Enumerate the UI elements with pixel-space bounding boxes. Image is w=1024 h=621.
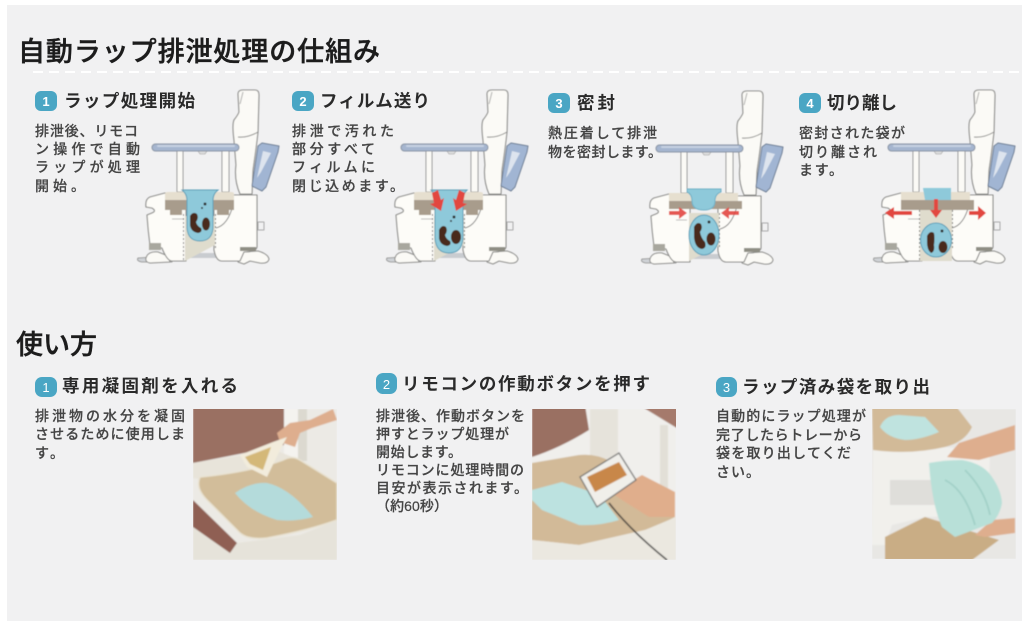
text: step 2: 閉じ込めます。 — [292, 178, 404, 194]
text: usage 1: させるために使用しま — [35, 426, 185, 442]
text: step 2: 排泄で汚れた — [292, 123, 394, 139]
illustration: chair step 3 — [642, 91, 783, 265]
photo: bag removal — [872, 405, 1016, 560]
step 4: cut off — [799, 90, 1015, 264]
text: usage 2: （約60秒） — [376, 498, 448, 514]
badge 2: 2 — [383, 377, 390, 392]
text: usage 1: す。 — [35, 445, 64, 461]
heading: step 1: ラップ処理開始 — [64, 91, 196, 111]
photo: pouring coagulant — [193, 405, 337, 560]
text: step 1: 開始。 — [35, 178, 85, 194]
badge 3: 3 — [555, 96, 563, 111]
text: usage 3: 袋を取り出してくだ — [716, 445, 851, 461]
usage 3: remove wrapped bag — [716, 377, 1016, 560]
title: how to use: 使い方 — [16, 330, 97, 360]
heading: step 4: 切り離し — [827, 93, 897, 113]
text: usage 3: さい。 — [716, 464, 760, 480]
text: step 1: 排泄後、リモコ — [35, 123, 138, 139]
text: step 3: 熱圧着して排泄 — [548, 125, 657, 141]
text: step 3: 物を密封します。 — [548, 144, 662, 160]
arrows: separate — [885, 199, 986, 220]
badge 2: 2 — [299, 94, 307, 109]
badge 1 — [35, 377, 57, 397]
badge 2 — [376, 373, 397, 394]
text: step 1 — [35, 123, 140, 194]
text: step 2: フィルムに — [292, 159, 375, 175]
text: step 4 — [799, 125, 905, 178]
heading: step 3: 密封 — [577, 93, 615, 113]
step 1: wrap start — [35, 90, 279, 264]
heading: usage 2: リモコンの作動ボタンを押す — [402, 374, 650, 394]
badge 3 — [548, 93, 570, 113]
text: usage 3: 自動的にラップ処理が — [716, 408, 866, 424]
usage 1: add coagulant — [35, 376, 337, 560]
illustration: chair step 4 — [874, 90, 1015, 264]
text: usage 2 — [376, 408, 528, 514]
text: usage 3 — [716, 408, 866, 480]
illustration: chair step 1 — [138, 90, 279, 264]
text: step 4: 切り離され — [799, 144, 877, 160]
text: usage 3: 完了したらトレーから — [716, 427, 862, 443]
heading: step 2: フィルム送り — [320, 91, 430, 111]
arrows: heat seal — [669, 207, 739, 219]
usage 2: press remote button — [376, 373, 680, 560]
text: usage 2: 目安が表示されます。 — [376, 480, 528, 496]
badge 2 — [292, 91, 314, 111]
illustration: chair step 2 — [386, 90, 528, 264]
badge 1 — [35, 91, 57, 111]
badge 4 — [799, 93, 821, 113]
text: usage 1: 排泄物の水分を凝固 — [35, 408, 185, 424]
text: usage 2: 排泄後、作動ボタンを — [376, 408, 525, 424]
text: step 2: 部分すべて — [292, 141, 375, 157]
text: step 4: 密封された袋が — [799, 125, 905, 141]
step 3: seal — [548, 91, 783, 265]
badge 3: 3 — [723, 380, 730, 395]
text: usage 2: リモコンに処理時間の — [376, 462, 524, 478]
text: step 4: ます。 — [799, 162, 843, 178]
arrows: press in — [430, 190, 467, 211]
text: step 2 — [292, 123, 404, 194]
badge 4: 4 — [806, 96, 814, 111]
badge 1: 1 — [42, 380, 50, 395]
text: step 1: ン操作で自動 — [35, 141, 140, 157]
badge 1: 1 — [42, 94, 50, 109]
step 2: film feed — [292, 90, 528, 264]
text: usage 2: 開始します。 — [376, 444, 462, 460]
text: step 1: ラップが処理 — [35, 159, 140, 175]
heading: usage 3: ラップ済み袋を取り出 — [742, 377, 930, 397]
photo: remote control — [532, 405, 680, 560]
text: usage 2: 押すとラップ処理が — [376, 426, 509, 442]
text: step 3 — [548, 125, 662, 160]
badge 3 — [716, 377, 737, 397]
text: usage 1 — [35, 408, 185, 461]
title: mechanism: 自動ラップ排泄処理の仕組み — [18, 37, 380, 67]
heading: usage 1: 専用凝固剤を入れる — [62, 376, 238, 396]
